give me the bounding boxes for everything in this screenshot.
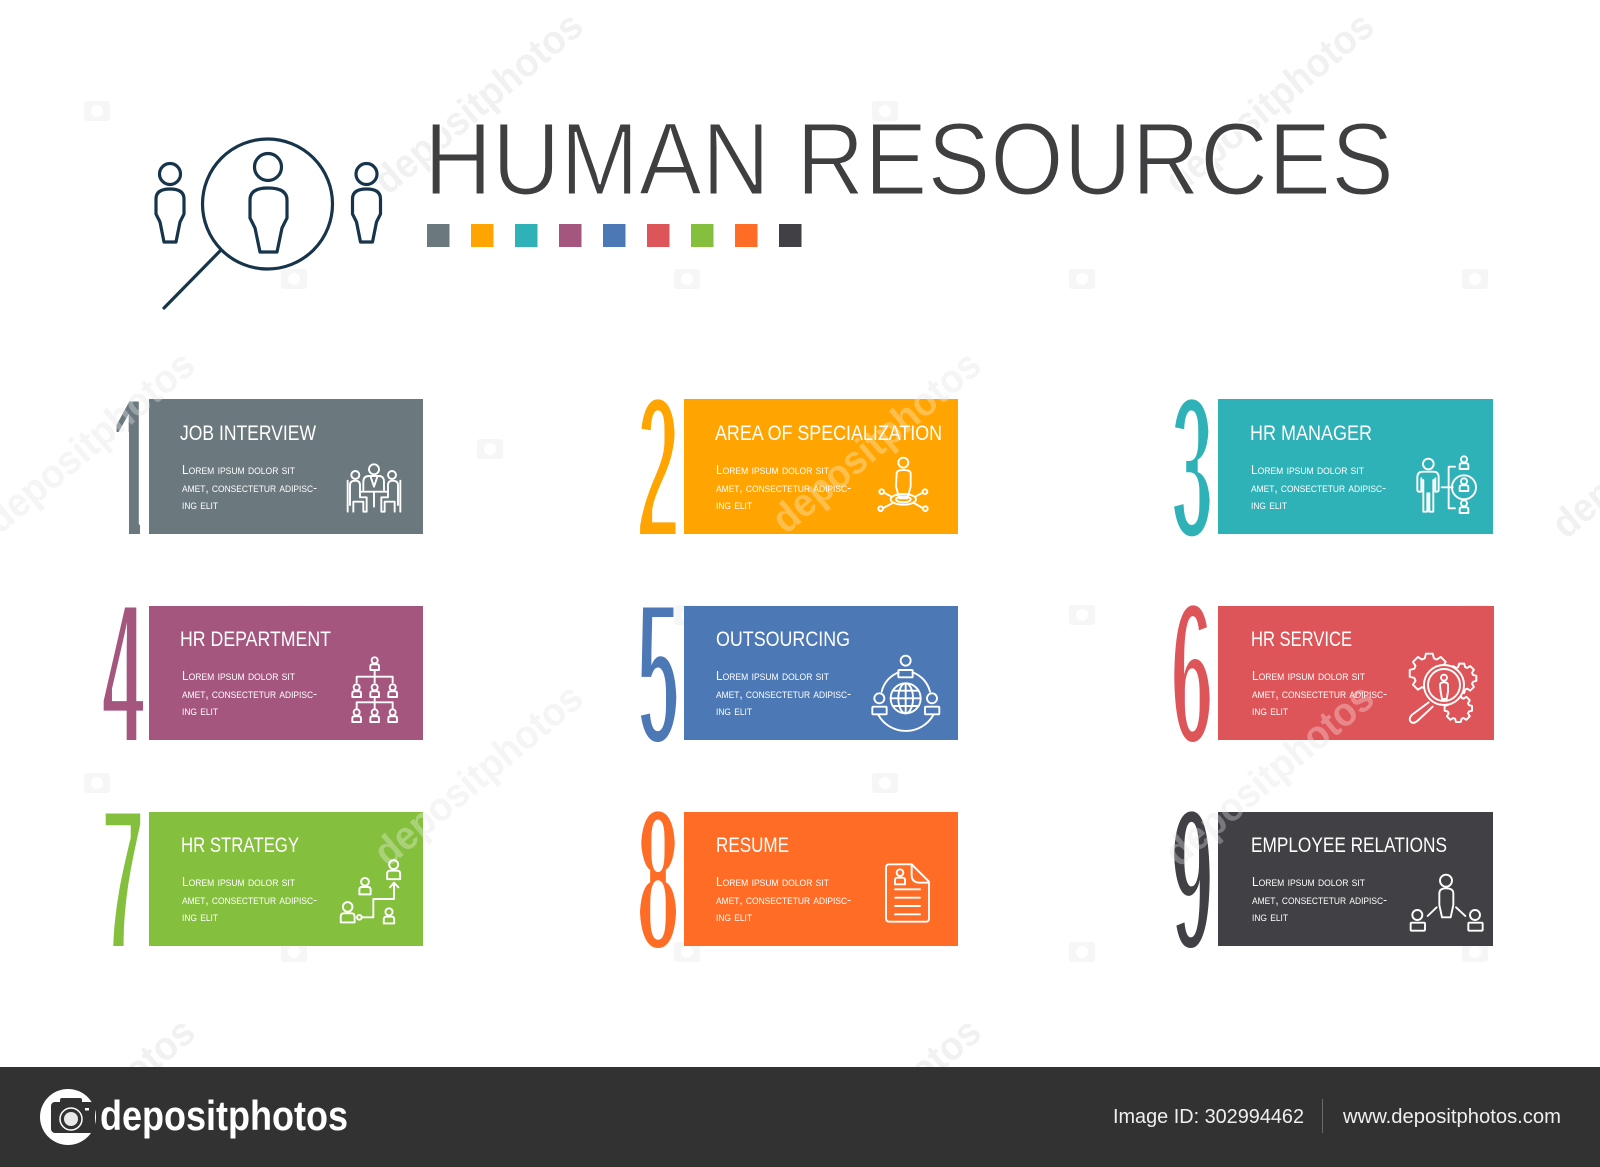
body text (182, 669, 317, 718)
watermark layer: faint camera marks and logotype on white: depositphotos (764, 342, 989, 542)
body text (182, 463, 317, 512)
watermark overlay on coloured areas (0, 342, 1382, 875)
panel: hr department (103, 558, 423, 791)
body text: Lorem ipsum dolor sit (182, 463, 295, 477)
panel: hr strategy (103, 764, 423, 997)
heading: OUTSOURCING (716, 627, 850, 651)
panel: job interview (116, 399, 423, 534)
body text: Lorem ipsum dolor sit (182, 875, 295, 889)
panel: area of specialization (638, 352, 958, 585)
icon: manager and team (1417, 456, 1476, 513)
number 2: 2 (638, 352, 678, 585)
divider (1322, 1099, 1323, 1133)
body text (716, 875, 851, 924)
card background (149, 812, 423, 946)
panel: employee relations (1172, 764, 1493, 997)
heading: HR MANAGER (1250, 421, 1372, 445)
card background (149, 399, 423, 534)
body text (1251, 463, 1386, 512)
number 4: 4 (103, 558, 143, 791)
heading: HR STRATEGY (181, 833, 299, 857)
body text (182, 875, 317, 924)
heading: HR DEPARTMENT (180, 627, 331, 651)
body text: Lorem ipsum dolor sit (1252, 669, 1365, 683)
number 1: 1 (112, 352, 152, 585)
website: www.depositphotos.com (1342, 1106, 1561, 1128)
body text: Lorem ipsum dolor sit (716, 463, 829, 477)
icon: global team (872, 656, 939, 731)
icon: resume document (886, 864, 929, 922)
panel: outsourcing (638, 558, 958, 791)
panel: hr service (1172, 558, 1494, 791)
body text: amet, consectetur adipisc- (182, 687, 317, 701)
body text: ing elit (182, 910, 218, 924)
logotype: depositphotos (100, 1092, 348, 1139)
icon: people under a magnifying glass (156, 139, 380, 308)
body text (1252, 669, 1387, 718)
number 9: 9 (1172, 764, 1212, 997)
body text: ing elit (716, 910, 752, 924)
number 3: 3 (1172, 352, 1212, 585)
body text: amet, consectetur adipisc- (716, 893, 851, 907)
body text: amet, consectetur adipisc- (1252, 687, 1387, 701)
heading: RESUME (716, 833, 789, 857)
body text: amet, consectetur adipisc- (182, 893, 317, 907)
icon: gears and magnifier (1410, 654, 1476, 723)
number 5: 5 (638, 558, 678, 791)
body text: amet, consectetur adipisc- (716, 687, 851, 701)
body text: amet, consectetur adipisc- (1251, 481, 1386, 495)
icon: career path (341, 860, 400, 923)
colour swatches (427, 224, 802, 247)
card background (1218, 812, 1493, 946)
body text: Lorem ipsum dolor sit (716, 669, 829, 683)
heading: JOB INTERVIEW (180, 421, 317, 445)
body text: ing elit (716, 498, 752, 512)
body text: amet, consectetur adipisc- (1252, 893, 1387, 907)
body text: amet, consectetur adipisc- (182, 481, 317, 495)
icon: org chart (352, 657, 397, 722)
body text: Lorem ipsum dolor sit (1251, 463, 1364, 477)
body text: Lorem ipsum dolor sit (182, 669, 295, 683)
card background (149, 606, 423, 740)
watermark layer: faint camera marks and logotype on white: depositphotos (1157, 675, 1382, 875)
card background (684, 812, 958, 946)
heading: EMPLOYEE RELATIONS (1251, 833, 1447, 857)
number 7: 7 (103, 764, 143, 997)
icon: interview table (348, 464, 400, 512)
card background (1218, 399, 1493, 534)
body text (716, 463, 851, 512)
card background (684, 606, 958, 740)
card background (1218, 606, 1494, 740)
title: HUMAN RESOURCES (424, 102, 1394, 216)
body text: ing elit (716, 704, 752, 718)
body text: ing elit (1252, 910, 1288, 924)
watermark overlay on coloured areas: depositphotos (764, 342, 989, 542)
watermark overlay on coloured areas: depositphotos (366, 675, 591, 875)
number 6: 6 (1172, 558, 1212, 791)
panel: resume (638, 764, 958, 997)
heading: AREA OF SPECIALIZATION (715, 421, 942, 445)
watermark overlay on coloured areas: depositphotos (1157, 675, 1382, 875)
watermark layer: faint camera marks and logotype on white: depositphotos (366, 675, 591, 875)
body text: ing elit (1251, 498, 1287, 512)
body text (716, 669, 851, 718)
footer bar (0, 1067, 1600, 1167)
body text: Lorem ipsum dolor sit (1252, 875, 1365, 889)
number 8: 8 (638, 764, 678, 997)
image id: Image ID: 302994462 (1113, 1106, 1304, 1128)
icon: employee relations (1411, 875, 1483, 931)
body text: ing elit (1252, 704, 1288, 718)
body text: ing elit (182, 704, 218, 718)
body text: amet, consectetur adipisc- (716, 481, 851, 495)
body text (1252, 875, 1387, 924)
card background (684, 399, 958, 534)
panel: hr manager (1172, 352, 1493, 585)
heading: HR SERVICE (1251, 627, 1352, 651)
body text: Lorem ipsum dolor sit (716, 875, 829, 889)
icon: camera logo (40, 1089, 96, 1145)
icon: person with nodes (878, 458, 928, 511)
body text: ing elit (182, 498, 218, 512)
